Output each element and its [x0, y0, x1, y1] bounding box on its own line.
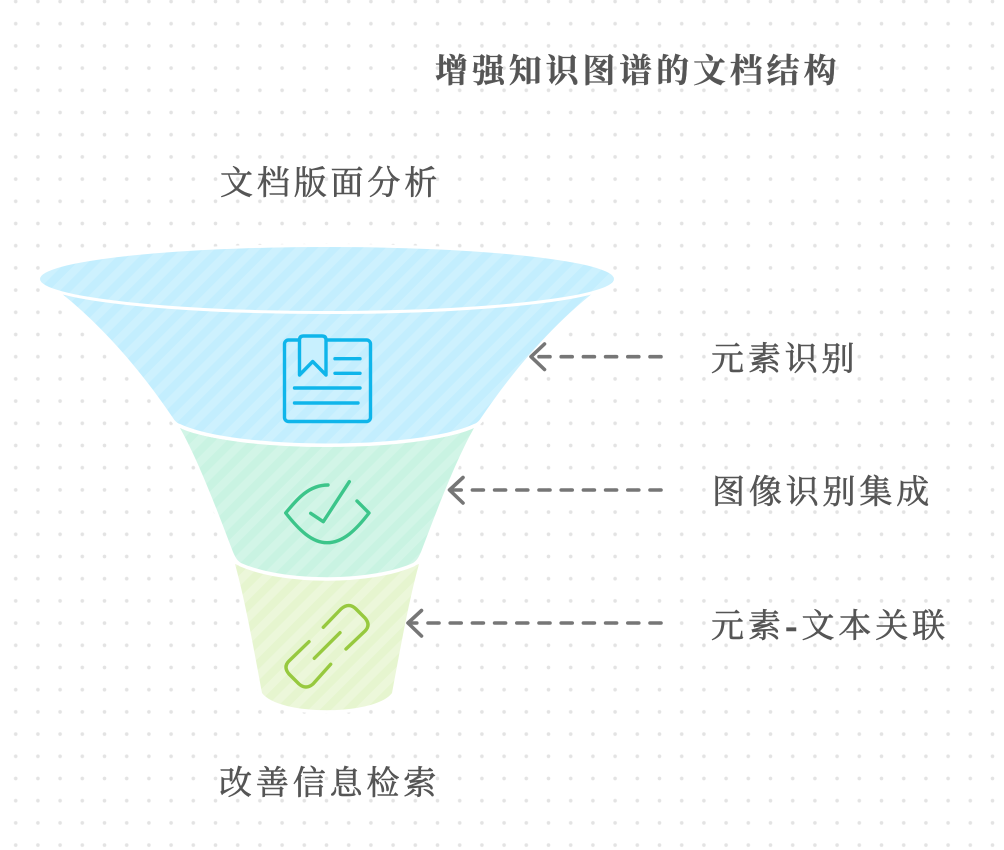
label: image recognition integration: 图像识别集成 [712, 474, 933, 511]
arrow: to first funnel section [531, 344, 661, 370]
arrow: to third funnel section [408, 610, 661, 636]
label: element-text association: 元素-文本关联 [711, 608, 949, 645]
funnel rim ellipse [40, 247, 614, 311]
arrow: to second funnel section [450, 478, 661, 503]
icon: chain link [286, 606, 368, 687]
icon: document with bookmark [284, 336, 370, 422]
funnel section: blue top body [52, 286, 602, 444]
funnel top label: 文档版面分析 [220, 165, 441, 202]
icon: eye with check mark [286, 482, 369, 543]
label: element recognition: 元素识别 [711, 341, 858, 378]
funnel section: green middle [180, 428, 474, 577]
funnel [40, 247, 614, 710]
title: 增强知识图谱的文档结构 [435, 53, 840, 90]
funnel section: yellow-green bottom [235, 564, 419, 710]
funnel bottom label: 改善信息检索 [219, 765, 440, 802]
